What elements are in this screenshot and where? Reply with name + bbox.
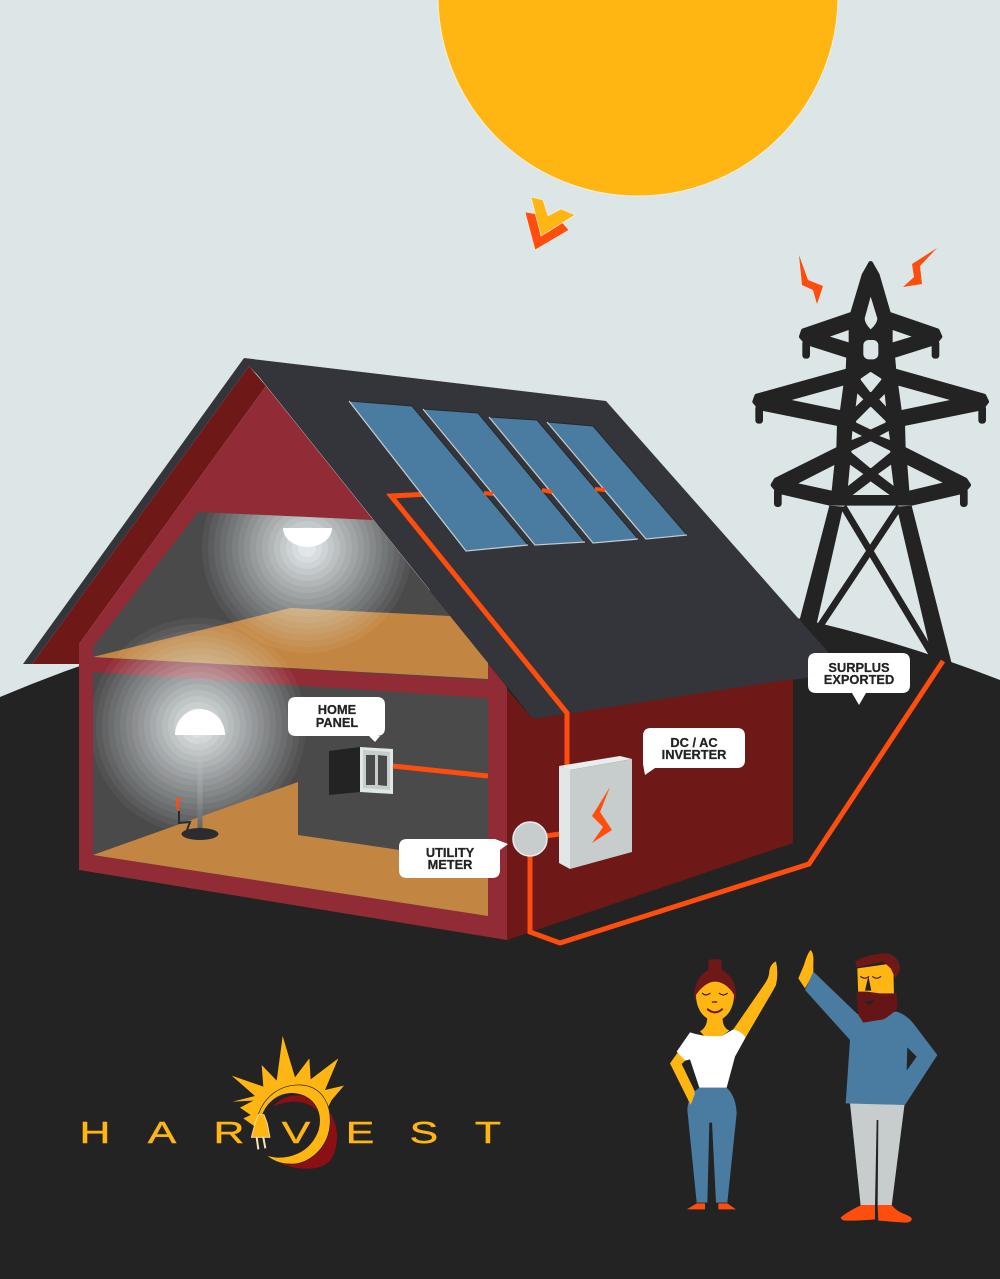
woman shoes <box>687 1203 736 1209</box>
man hand <box>798 950 813 988</box>
panel highlights <box>349 401 687 551</box>
lower floor <box>93 782 488 916</box>
inverter box <box>559 756 632 869</box>
logo sun <box>232 1036 344 1169</box>
lower room <box>93 672 488 916</box>
front wall <box>79 386 507 940</box>
wire: meter to inverter <box>545 834 560 836</box>
man nose <box>865 976 871 991</box>
man hair <box>855 953 900 979</box>
wire: home panel to wall <box>393 766 488 776</box>
ceiling lamp <box>283 528 332 547</box>
woman face <box>696 982 734 1021</box>
logo: Harvest <box>80 1036 501 1169</box>
icon: tower spark right <box>903 248 937 287</box>
panel 4 <box>547 422 687 539</box>
woman arms and neck <box>670 961 777 1105</box>
man mouth <box>863 1000 875 1005</box>
man face <box>857 963 894 998</box>
attic floor <box>93 608 488 679</box>
callout: surplus exported: SURPLUS <box>828 660 890 675</box>
callout: home panel <box>288 697 385 742</box>
gable edge <box>23 358 300 664</box>
transmission tower <box>755 263 987 663</box>
home panel box <box>329 747 393 795</box>
callout: utility meter <box>399 839 508 878</box>
lower light glow <box>96 623 300 826</box>
callout: surplus exported: EXPORTED <box>824 672 894 687</box>
callout: home panel: HOME <box>318 702 357 717</box>
callout: inverter <box>643 728 745 775</box>
woman <box>670 959 777 1209</box>
floor lamp <box>175 709 225 840</box>
man sweater <box>805 972 937 1105</box>
house <box>23 358 845 940</box>
wire: meter to grid <box>530 661 943 943</box>
callout: inverter: INVERTER <box>662 747 726 762</box>
logo wordmark: HARVEST <box>80 1115 501 1150</box>
callout: utility meter: UTILITY <box>426 845 475 860</box>
gable eave <box>32 366 266 664</box>
woman pants <box>687 1088 737 1203</box>
woman features <box>702 993 727 1012</box>
panel connectors <box>484 489 605 494</box>
callout: inverter: DC / AC <box>670 735 718 750</box>
man <box>798 950 937 1223</box>
panel 2 <box>423 409 585 545</box>
panel 3 <box>489 417 638 543</box>
woman hand at hip <box>686 1083 695 1105</box>
solar panels <box>349 401 687 551</box>
utility meter <box>513 822 547 856</box>
sun <box>438 0 838 196</box>
roof plane <box>244 358 845 719</box>
side wall <box>505 679 793 940</box>
logo plug <box>251 1115 270 1149</box>
wire: roof to inverter <box>391 494 567 770</box>
woman shirt <box>677 1029 746 1088</box>
man eyes <box>861 977 881 978</box>
icon: sunlight arrow <box>525 197 575 250</box>
callout: utility meter: METER <box>428 857 472 872</box>
callout: surplus exported <box>808 653 910 705</box>
panel 1 <box>349 401 528 551</box>
man shoes <box>841 1205 912 1223</box>
attic light glow <box>202 512 410 653</box>
woman hair <box>694 959 736 999</box>
icon: tower spark left <box>799 255 823 304</box>
attic room <box>93 512 488 680</box>
man beard <box>857 992 897 1023</box>
dark hill <box>0 587 1000 1279</box>
callout: home panel: PANEL <box>316 715 358 730</box>
man pants <box>850 1103 905 1206</box>
